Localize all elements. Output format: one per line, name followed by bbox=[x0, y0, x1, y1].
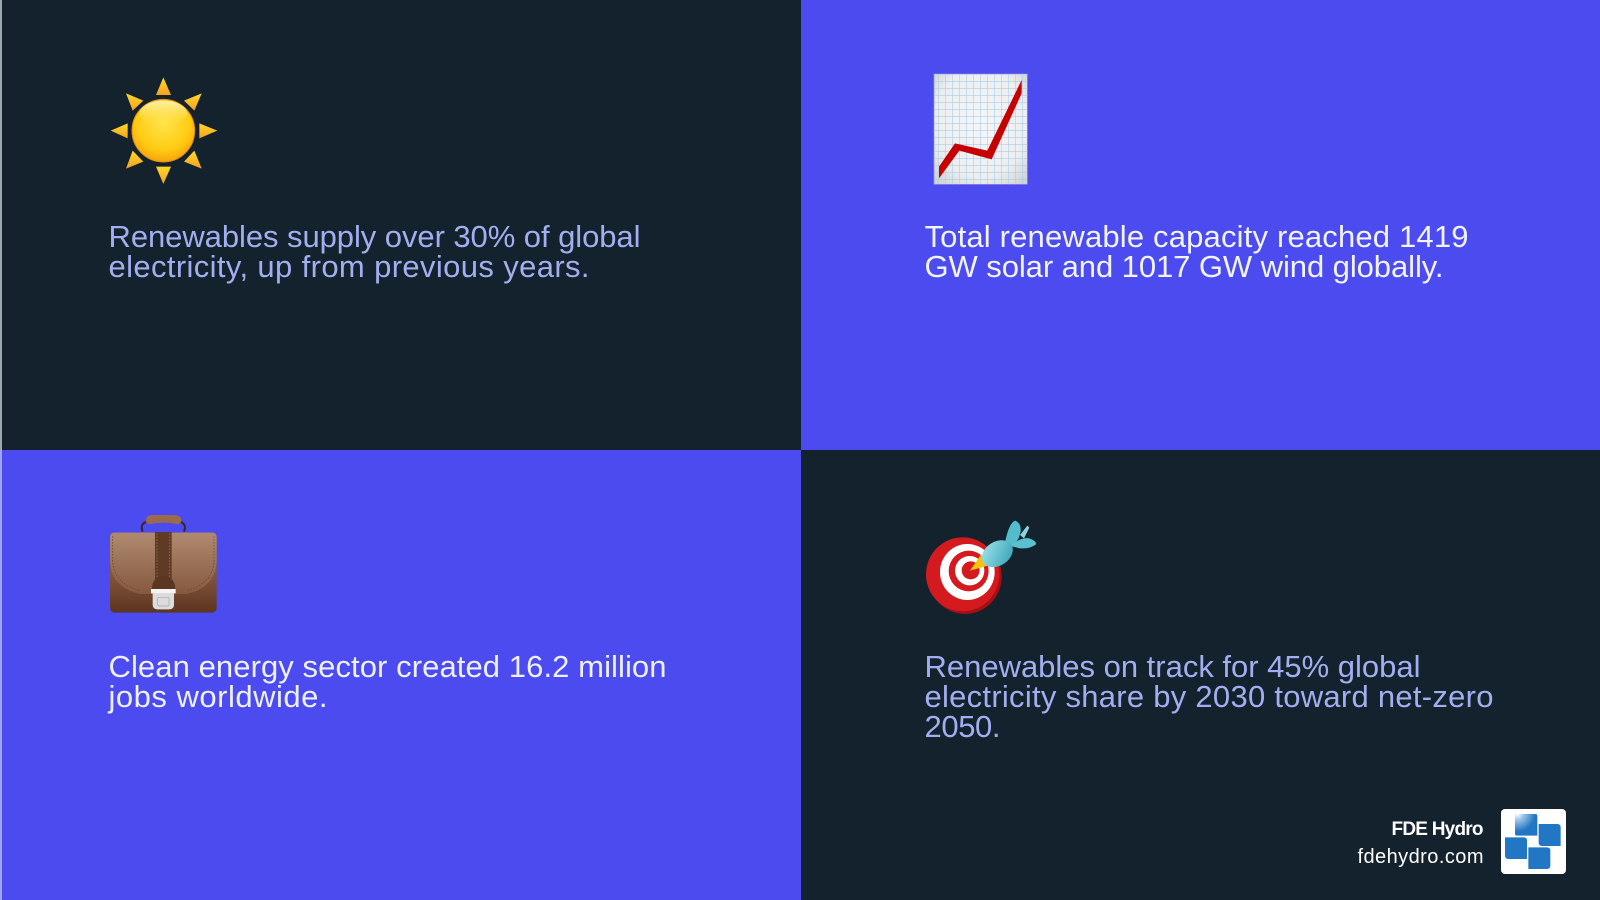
panel: global electricity share bbox=[0, 0, 801, 450]
icon: sun bbox=[111, 77, 217, 184]
text: jobs: Clean energy sector created 16.2 million bbox=[108, 649, 666, 684]
panel: clean energy jobs bbox=[0, 450, 801, 900]
brand block bbox=[1358, 809, 1566, 874]
icon: rising chart bbox=[934, 74, 1027, 184]
brand url: fdehydro.com bbox=[1358, 846, 1484, 868]
icon: dart on target bbox=[926, 521, 1036, 614]
text: capacity: GW solar and 1017 GW wind globally. bbox=[924, 249, 1444, 284]
text: capacity: Total renewable capacity reached 1419 bbox=[924, 219, 1468, 254]
text: renewables share: Renewables supply over 30% of global bbox=[108, 219, 640, 254]
text: jobs: jobs worldwide. bbox=[108, 679, 328, 714]
logo bbox=[1501, 809, 1566, 874]
brand name: FDE Hydro bbox=[1392, 819, 1484, 840]
text: target: electricity share by 2030 toward net-zero bbox=[924, 679, 1494, 714]
text: renewables share: electricity, up from previous years. bbox=[108, 249, 590, 284]
text: target: 2050. bbox=[924, 709, 1000, 744]
panel: installed capacity bbox=[801, 0, 1600, 450]
icon: briefcase bbox=[110, 515, 217, 613]
text: target: Renewables on track for 45% global bbox=[924, 649, 1420, 684]
panel: 2030 target bbox=[801, 450, 1600, 900]
